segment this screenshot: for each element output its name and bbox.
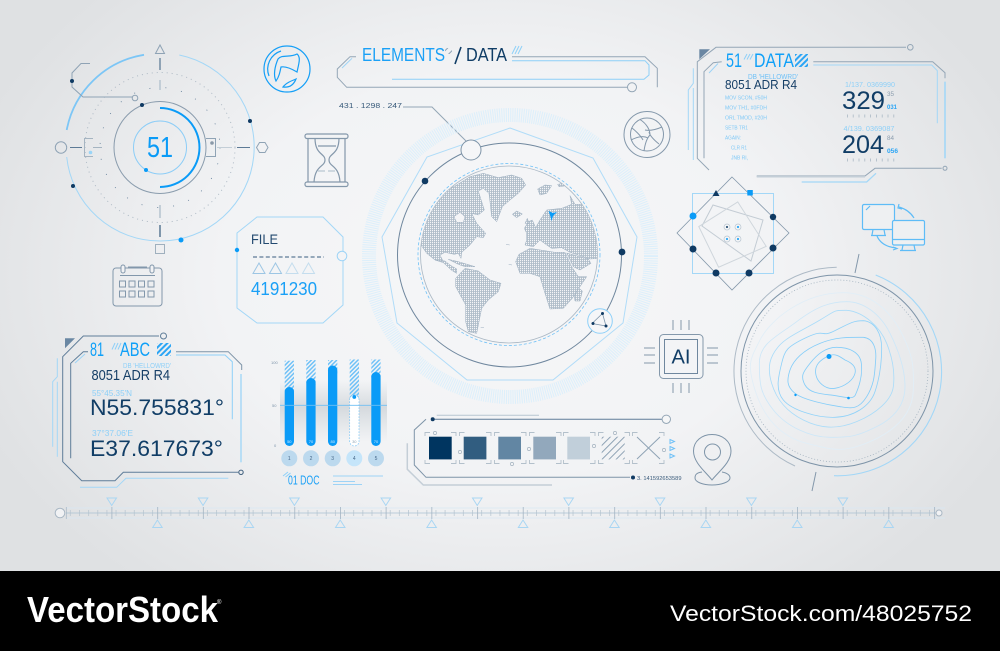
globe dots <box>422 178 625 255</box>
panel: data 51: ORL TMOD, #20H <box>725 116 767 122</box>
icon: AI chip: AI <box>672 346 690 368</box>
timeline <box>55 498 945 528</box>
panel: data 51: MOV SCON, #50H <box>725 96 767 102</box>
panel: data 51: 84 <box>887 135 894 142</box>
panel: coordinates 81 abc: N55.755831° <box>90 395 224 420</box>
footer band: VectorStock <box>27 589 219 630</box>
footer band <box>0 571 1000 651</box>
bar chart: 50 <box>287 439 292 444</box>
colour swatches panel <box>407 415 682 485</box>
heading panel: elements / data: DATA <box>466 45 507 65</box>
footer band: VectorStock.com/48025752 <box>670 601 972 626</box>
label: coordinates leader <box>339 101 466 141</box>
panel: data 51: 056 <box>887 148 898 155</box>
panel: file: FILE <box>251 231 278 247</box>
bar chart: 0 <box>274 443 277 448</box>
panel: data 51: 4/139. 0369087 <box>844 124 894 133</box>
panel: data 51: DATA <box>754 51 794 72</box>
map marker <box>548 211 557 221</box>
panel: data 51: 204 <box>842 131 884 159</box>
icon: AI chip <box>644 320 718 393</box>
icon: globe <box>264 46 310 92</box>
panel: data 51: SETB TR1 <box>725 126 748 132</box>
bar chart: 1 <box>288 456 291 462</box>
bar chart <box>271 360 387 488</box>
heading panel: elements / data: ELEMENTS <box>362 45 445 65</box>
bar chart: 5 <box>375 456 378 462</box>
panel: data 51: 329 <box>842 87 885 115</box>
panel: data 51: AGAIN: <box>725 136 741 142</box>
contour lines <box>750 293 914 449</box>
icon: synced monitors <box>862 204 924 250</box>
bar chart: 01 DOC <box>288 474 320 488</box>
icon: constellation badge <box>588 309 612 333</box>
world globe <box>398 143 622 367</box>
bar chart: 50 <box>272 403 277 408</box>
footer band: ® <box>217 599 222 606</box>
bar chart: 80 <box>330 439 336 444</box>
panel: data 51: MOV TH1, #0FDH <box>725 106 767 112</box>
panel: data 51: 35 <box>887 91 894 98</box>
swatch row <box>429 437 625 459</box>
bar chart: 70 <box>309 439 314 444</box>
bar chart: 70 <box>374 439 379 444</box>
panel: data 51: 8051 ADR R4 <box>725 77 797 92</box>
panel: coordinates 81 abc: 81 <box>90 340 104 361</box>
heading panel: elements / data <box>337 45 657 92</box>
panel: coordinates 81 abc: DB 'HELLOWRD' <box>123 363 171 370</box>
radial gauge 51 <box>55 45 268 254</box>
panel: data 51: 1/137. 0369990 <box>845 80 895 89</box>
panel: coordinates 81 abc: 37°37.06'E <box>92 429 133 438</box>
icon: calendar <box>113 265 162 306</box>
panel: data 51: JNB RI, <box>731 156 748 162</box>
colour swatches panel: 3. 141592653589 <box>637 476 682 482</box>
panel: data 51: 51 <box>726 51 742 72</box>
panel: coordinates 81 abc: 8051 ADR R4 <box>92 367 170 384</box>
hatched outer ring <box>369 115 651 397</box>
bar chart: 3 <box>331 456 334 462</box>
icon: lens aperture <box>624 112 670 158</box>
bar chart: 2 <box>310 456 313 462</box>
bar chart: 4 <box>353 456 356 462</box>
polygon frame <box>382 128 637 380</box>
panel: file <box>235 217 347 323</box>
panel: data 51 <box>688 44 947 182</box>
panel: coordinates 81 abc: 55°45.35'N <box>92 389 132 398</box>
panel: coordinates 81 abc <box>53 333 243 487</box>
map: world continents <box>421 173 599 333</box>
panel: file: 4191230 <box>251 279 317 299</box>
bar chart: 30 <box>352 439 357 444</box>
label: coordinates leader: 431 . 1298 . 247 <box>339 101 402 110</box>
contour radar <box>734 254 942 491</box>
icon: hourglass <box>305 134 348 186</box>
bar chart: 100 <box>271 360 278 365</box>
panel: data 51: DB 'HELLOWRD' <box>748 74 798 81</box>
globe connector circle <box>461 140 481 160</box>
geometric diamond <box>677 177 789 290</box>
icon: location pin <box>694 434 731 485</box>
panel: coordinates 81 abc: E37.617673° <box>90 436 223 461</box>
radial gauge 51: 51 <box>147 132 173 164</box>
panel: data 51: CLR R1 <box>731 146 747 152</box>
panel: data 51: 031 <box>887 104 897 111</box>
panel: coordinates 81 abc: ABC <box>120 340 150 361</box>
